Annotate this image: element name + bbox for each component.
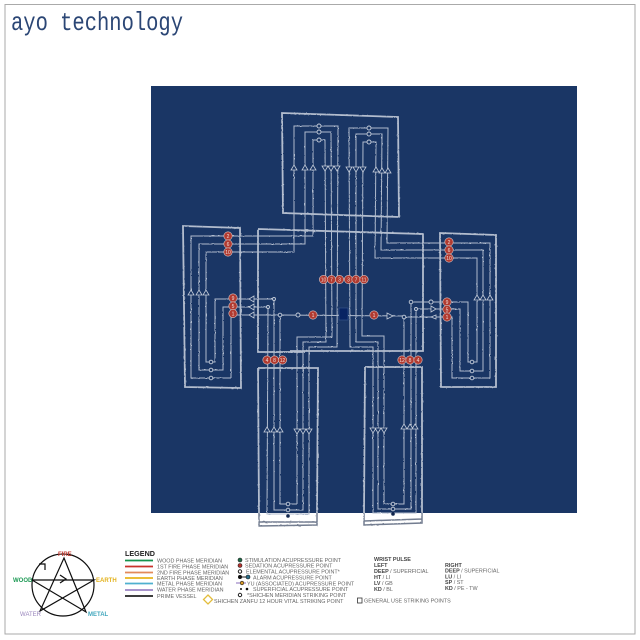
legend: meridian lines: WATER PHASE MERIDIAN xyxy=(157,588,224,594)
phase labels: WATER xyxy=(20,612,42,618)
numbered points: centre row: 10 xyxy=(321,278,326,284)
arm triangles xyxy=(188,290,493,319)
numbered points: right leg: 12 xyxy=(399,358,405,364)
legend: point symbols: ELEMENTAL ACUPRESSURE POINT* xyxy=(246,570,341,576)
wrist pulse table: KD / PE - TW xyxy=(445,586,478,592)
numbered points: centre row: 11 xyxy=(361,278,367,284)
numbered points: torso: 1 xyxy=(373,313,376,319)
legend: meridian lines: 1ST FIRE PHASE MERIDIAN xyxy=(157,564,228,570)
legend: point symbols: SEDATION ACUPRESSURE POINT xyxy=(245,564,333,570)
shichen label: SHICHEN ZANFU 12 HOUR VITAL STRIKING POINT xyxy=(214,599,344,605)
phase labels: FIRE xyxy=(58,552,72,558)
wrist pulse table: KD / BL xyxy=(374,587,393,593)
numbered points: left leg: 8 xyxy=(273,358,276,364)
general use label: GENERAL USE STRIKING POINTS xyxy=(364,598,451,604)
wrist pulse table: HT / LI xyxy=(374,575,390,581)
numbered points: left arm lower: 5 xyxy=(232,304,235,310)
legend: meridian lines: METAL PHASE MERIDIAN xyxy=(157,582,222,588)
wrist pulse table: LEFT xyxy=(374,563,388,569)
numbered points: torso: 1 xyxy=(312,313,315,319)
numbered points: right leg: 8 xyxy=(409,358,412,364)
numbered points: right leg xyxy=(398,356,422,364)
left leg outline xyxy=(258,368,318,513)
wrist pulse table: WRIST PULSE xyxy=(374,557,411,563)
phase labels: METAL xyxy=(88,612,109,618)
numbered points: left arm lower xyxy=(229,294,237,318)
numbered points: right leg: 4 xyxy=(417,358,420,364)
title: ayo technology xyxy=(11,8,183,38)
wrist pulse table xyxy=(374,557,500,593)
legend heading: LEGEND xyxy=(125,549,155,558)
phase labels xyxy=(13,552,117,618)
numbered points: right arm lower: 1 xyxy=(446,315,449,321)
head triangles xyxy=(291,165,391,173)
numbered points: centre row xyxy=(319,275,368,284)
numbered points: left leg xyxy=(263,356,287,364)
body outline xyxy=(258,229,423,352)
numbered points: right arm upper: 2 xyxy=(448,240,451,246)
panel: blue background xyxy=(151,86,577,513)
left side meridian loop xyxy=(191,126,338,514)
junction points xyxy=(209,124,474,512)
numbered points: left arm upper: 10 xyxy=(225,250,231,256)
numbered points: right arm lower xyxy=(443,298,451,321)
prime vessel centre line xyxy=(280,315,404,316)
numbered points: right arm upper xyxy=(445,238,453,262)
numbered points: centre row: 7 xyxy=(330,278,333,284)
legend: point symbols: SUPERFICIAL ACUPRESSURE POINT xyxy=(253,587,349,593)
legend: meridian lines xyxy=(125,549,229,600)
icon: general use box xyxy=(358,598,362,603)
numbered points: left arm lower: 9 xyxy=(232,296,235,302)
right arm outline xyxy=(440,233,496,387)
numbered points: left leg: 12 xyxy=(280,358,285,364)
numbered points: centre row: 3 xyxy=(347,278,350,284)
numbered points: left arm upper: 6 xyxy=(227,242,230,248)
numbered points: right arm lower: 5 xyxy=(446,308,449,314)
right leg outline xyxy=(364,367,422,513)
right side meridian loop xyxy=(349,128,490,513)
numbered points: torso xyxy=(309,311,378,319)
numbered points: left arm upper: 2 xyxy=(227,234,230,240)
wrist pulse table: RIGHT xyxy=(445,563,462,569)
five phase pentagram xyxy=(13,552,117,618)
striking points below panel xyxy=(286,512,395,518)
wrist pulse table: LV / GB xyxy=(374,581,393,587)
icon: shichen diamond xyxy=(204,595,212,604)
numbered points: left arm lower: 1 xyxy=(232,312,235,318)
leg triangles xyxy=(264,424,418,434)
legend: point symbols: STIMULATION ACUPRESSURE POINT xyxy=(245,558,342,564)
head outline xyxy=(282,113,399,217)
diagram: meridian figure xyxy=(183,113,496,526)
phase labels: EARTH xyxy=(96,578,117,584)
legend: point symbols: YU (ASSOCIATED) ACUPRESSURE POINT xyxy=(247,582,355,588)
phase labels: WOOD xyxy=(13,578,33,584)
prime vessel box xyxy=(339,308,348,320)
wrist pulse table: DEEP / SUPERFICIAL xyxy=(374,569,429,575)
wrist pulse table: SP / ST xyxy=(445,580,464,586)
leg outlines below panel xyxy=(259,513,422,526)
legend: meridian lines: PRIME VESSEL xyxy=(157,594,197,600)
legend: meridian lines: EARTH PHASE MERIDIAN xyxy=(157,576,223,582)
legend: point symbols xyxy=(236,558,355,599)
numbered points: centre row: 7 xyxy=(355,278,358,284)
numbered points: right arm upper: 6 xyxy=(448,248,451,254)
left arm outline xyxy=(183,226,241,388)
numbered points: right arm upper: 10 xyxy=(446,256,452,262)
numbered points: left arm upper xyxy=(224,232,232,256)
wrist pulse table: LU / LI xyxy=(445,574,461,580)
legend: meridian lines: WOOD PHASE MERIDIAN xyxy=(157,558,222,564)
legend: meridian lines: 2ND FIRE PHASE MERIDIAN xyxy=(157,570,229,576)
numbered points: left leg: 4 xyxy=(266,358,269,364)
wrist pulse table: DEEP / SUPERFICIAL xyxy=(445,568,500,574)
legend: point symbols: ALARM ACUPRESSURE POINT xyxy=(253,576,332,582)
numbered points: centre row: 3 xyxy=(338,278,341,284)
legend: point symbols: *SHICHEN MERIDIAN STRIKING POINT xyxy=(247,593,347,599)
numbered points: right arm lower: 9 xyxy=(446,300,449,306)
pentagram circle and star xyxy=(32,554,94,616)
